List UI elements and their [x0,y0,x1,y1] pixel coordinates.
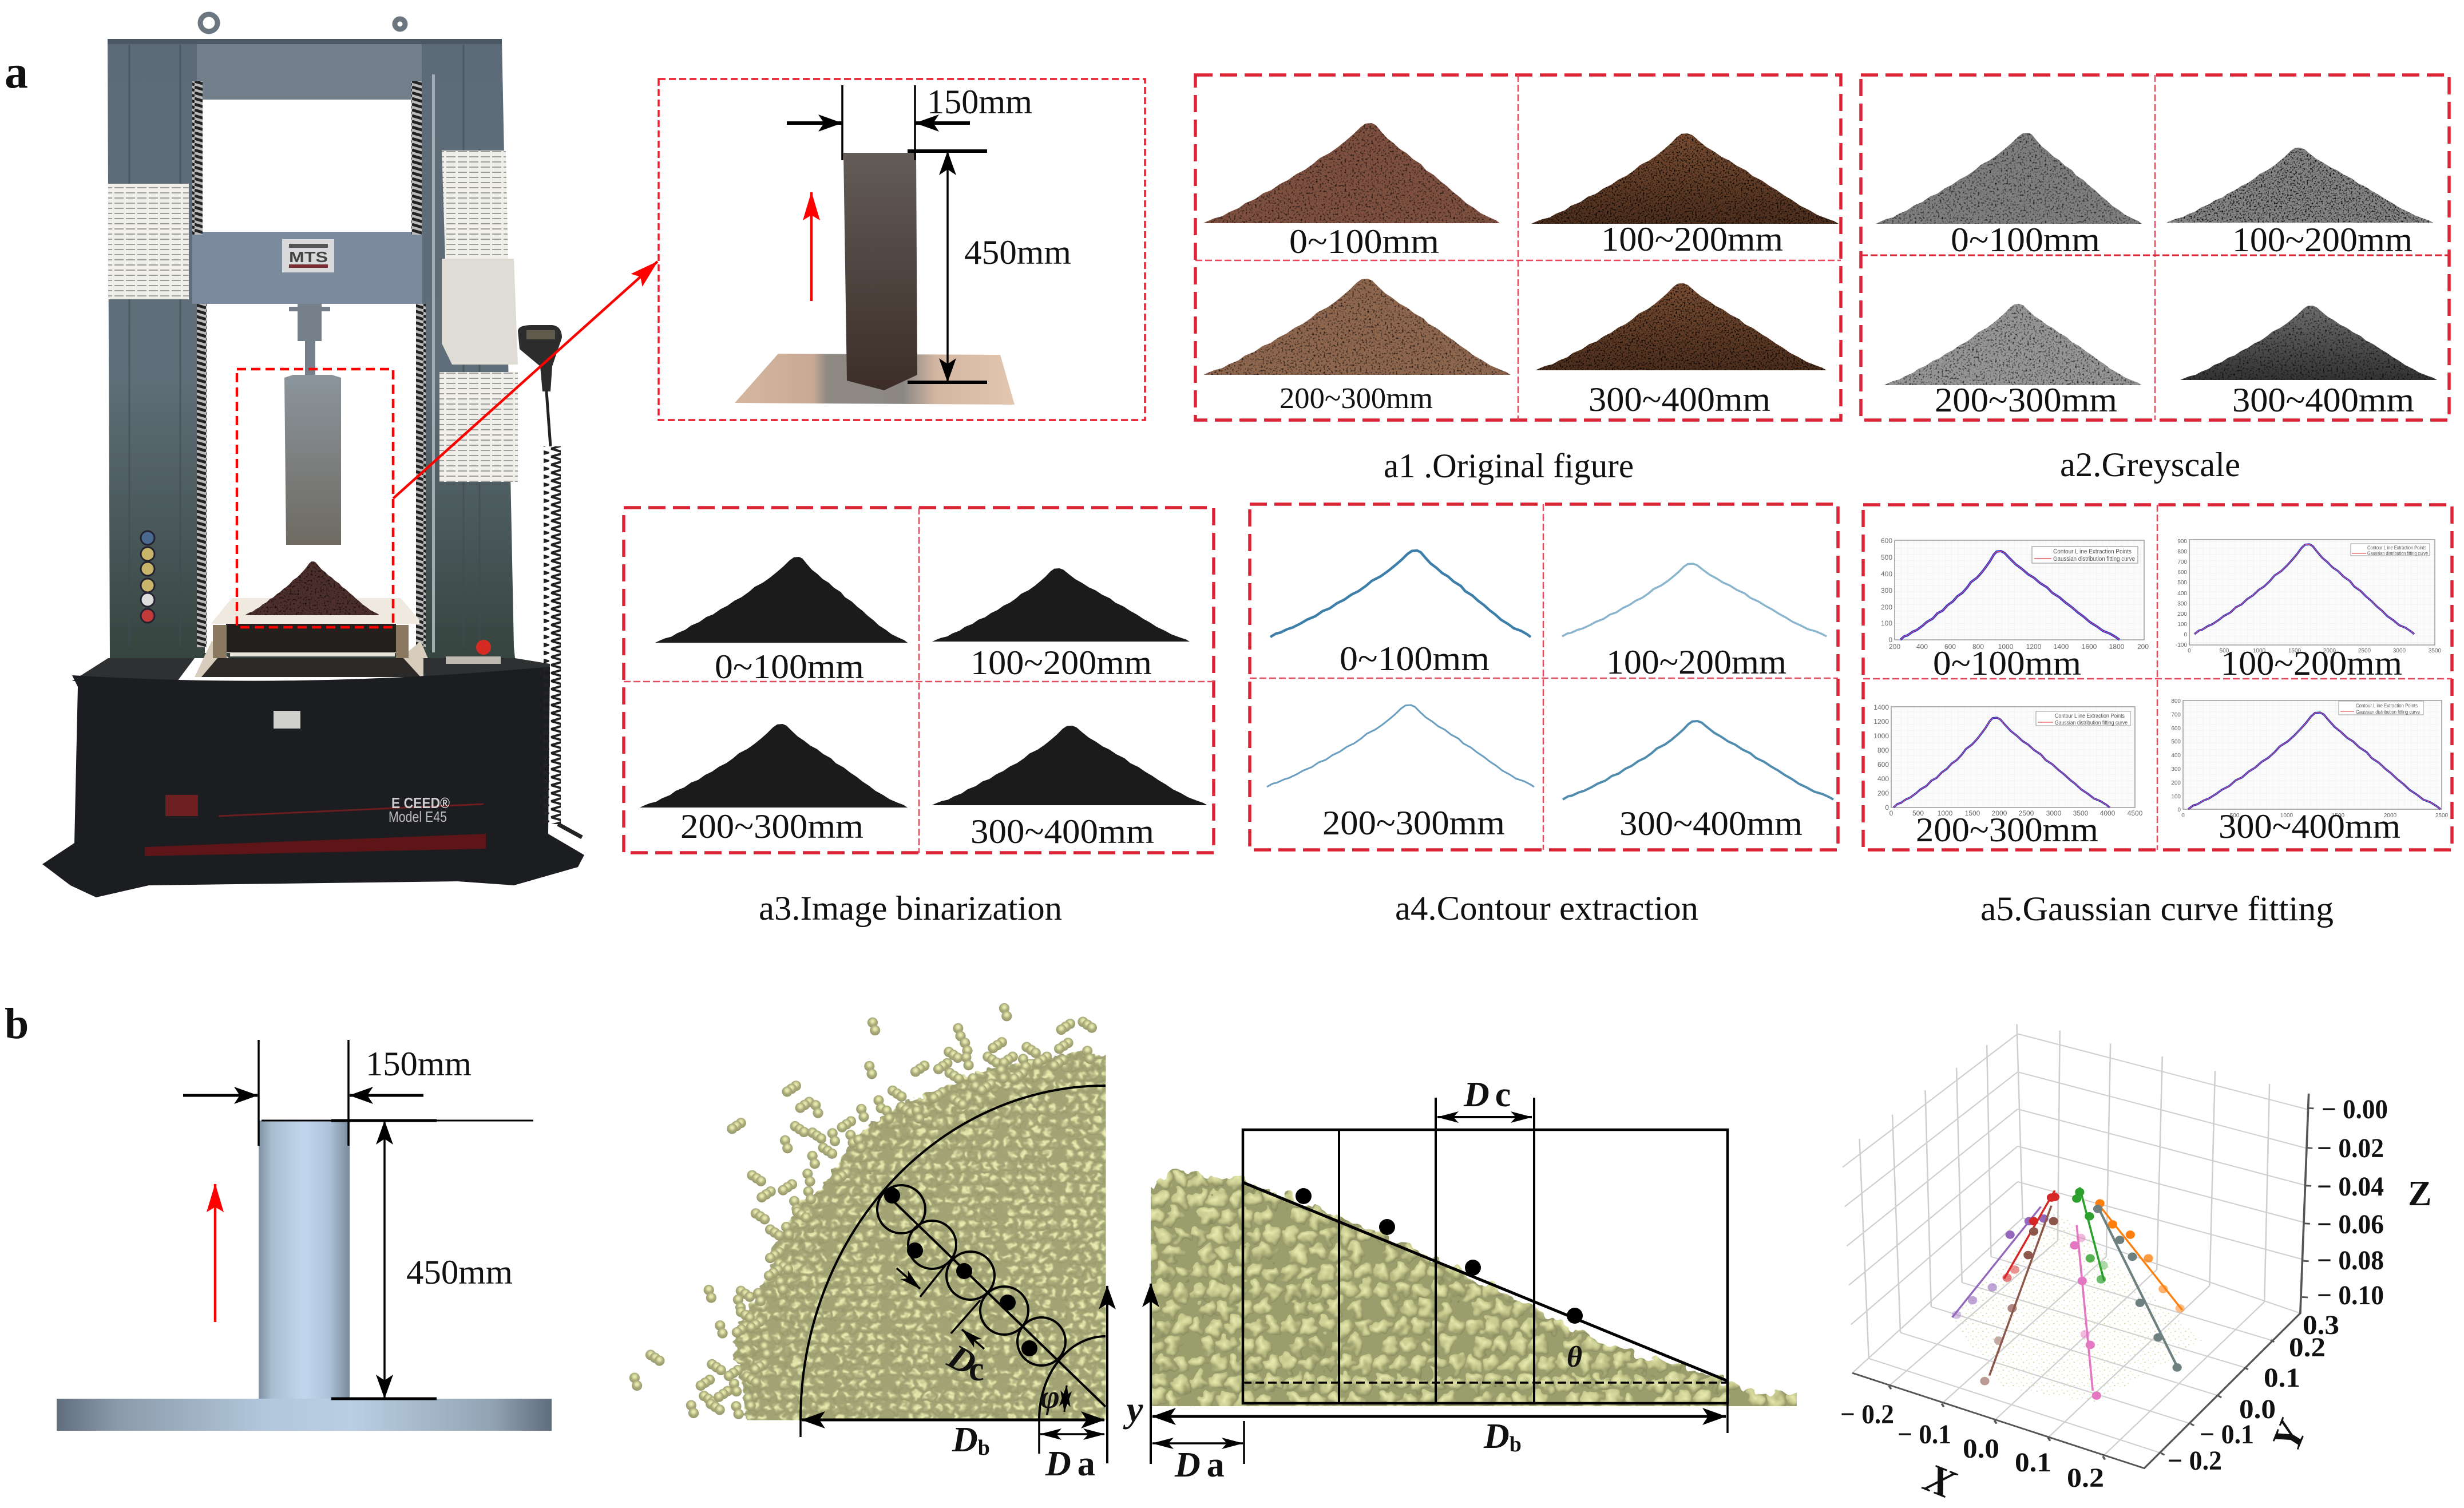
axes and dimensions [801,1286,1107,1463]
chart 100~200: 700 [2177,559,2187,565]
labels: D [952,1420,978,1459]
a1 labels [1279,220,1783,418]
dimension 450 mm: 450mm [964,233,1071,271]
chart 100~200: 3500 [2429,648,2442,654]
contour 100~200 [1558,564,1827,636]
a5 labels: 200~300mm [1916,811,2098,849]
y axis ticks: − 0.1 [2200,1419,2254,1450]
chart 100~200: 0 [2184,632,2187,638]
y axis ticks: 0.2 [2289,1332,2326,1363]
chart 0~100: 200 [1881,603,1892,611]
chart 100~200: 400 [2177,591,2187,597]
pile 300~400 [1535,283,1827,370]
chart 100~200: 500 [2220,648,2229,654]
chart 300~400: 200 [2171,780,2181,786]
pile 200~300 [1203,279,1519,375]
panel: a2 greyscale [1861,75,2449,420]
chart 0~100: Contour L ine Extraction Points [2053,548,2132,555]
panel: specimen closeup [659,79,1145,420]
chart 200~300: 2000 [1992,809,2007,817]
a4 labels [1322,640,1803,842]
grey pile 3 [1884,304,2146,385]
base plate [57,1399,552,1431]
soil pile [245,561,380,615]
chart 200~300: 1200 [1873,718,1889,726]
particle speckle floor [1950,1208,2203,1402]
caption a2: a2.Greyscale [2060,446,2240,484]
orange series [2095,1199,2185,1313]
chart 0~100: 1800 [2109,643,2125,651]
chart 200~300: 1400 [1873,703,1889,711]
pile 0~100 [1203,123,1517,223]
chart 0~100: 400 [1916,643,1928,651]
chart 200~300: 1000 [1938,809,1953,817]
a5 labels: 0~100mm [1933,644,2081,682]
plot drawing [1843,1024,2314,1469]
z axis ticks: − 0.02 [2317,1133,2384,1163]
slope line [1243,1182,1728,1381]
purple series [1952,1206,2049,1319]
base plate [735,354,1015,405]
red base band [145,834,486,856]
a2 labels [1935,221,2414,419]
black piles [640,557,1207,808]
labels: Da [1045,1444,1095,1483]
chart 300~400: 0 [2181,813,2185,819]
chart 200~300: 0 [1885,804,1889,812]
chart 100~200: 1500 [2288,648,2301,654]
a3 labels: 0~100mm [715,648,864,686]
grey pile 4 [2180,306,2439,380]
dimension 450 mm [262,1121,533,1399]
labels: c [969,1350,984,1388]
a2 labels: 100~200mm [2232,221,2412,259]
eye bolts [200,14,405,31]
labels [1123,1075,1582,1485]
contour 300~400 [1560,721,1833,799]
chart 0~100: 200 [2137,643,2149,651]
paper notices [108,151,518,482]
z axis ticks: − 0.00 [2322,1094,2388,1125]
labels: Dc [1463,1075,1511,1114]
base label plate [274,711,300,729]
sampling dots [1296,1188,1583,1324]
red series [2002,1190,2059,1282]
cylinder [259,1121,350,1399]
dimensions [1151,1117,1728,1464]
specimen column [284,375,341,545]
chart 300~400: 1000 [2280,813,2293,819]
chart 200~300: Gaussian distribution fitting curve [2055,720,2128,726]
z axis title: Z [2408,1174,2431,1213]
x axis ticks: 0.0 [1963,1434,1999,1464]
y axis ticks: 0.0 [2239,1394,2276,1424]
grey pile 2 [2164,148,2433,223]
chart 300~400: 0 [2177,807,2181,813]
panel: top view particle pile [629,1003,1123,1483]
labels: b [978,1436,990,1460]
Dc ticks [897,1265,984,1349]
panel: testing machine photo [42,14,657,897]
grid lines [1843,1024,2309,1456]
a1 labels: 300~400mm [1588,381,1770,418]
chart 100~200: 3000 [2393,648,2406,654]
labels: y [1123,1389,1143,1430]
angle arrow [1064,1386,1067,1412]
y axis ticks: − 0.2 [2168,1446,2222,1476]
brown series [1980,1206,2058,1386]
chart 0~100: 200 [1889,643,1900,651]
a4 labels: 100~200mm [1606,643,1786,681]
grey pile 1 [1876,133,2158,224]
chart 200~300 [1873,703,2143,817]
a5 labels: 100~200mm [2221,644,2402,682]
y axis ticks: 0.1 [2264,1363,2300,1393]
chart 100~200: -100 [2176,642,2187,648]
sampling dots [884,1188,1037,1356]
dimension 150 mm [787,83,1032,160]
y axis title: Y [2263,1413,2316,1456]
panel: 3D fitted lines plot [1840,1024,2431,1508]
a3 labels: 300~400mm [970,813,1154,850]
particles [629,1003,1123,1428]
grey series [2093,1205,2182,1372]
MTS red mark [165,795,198,816]
label: b: b [5,1000,29,1048]
dimension 150 mm: 150mm [366,1045,472,1083]
MTS badge: MTS [289,248,328,266]
label: a: a [5,46,28,98]
chart 100~200: 2000 [2323,648,2336,654]
outer and inner arcs [801,1086,1106,1420]
x axis title: X [1918,1454,1962,1508]
dimension 150 mm [183,1040,472,1146]
hanger clamp [289,304,330,375]
panel: a4 contour extraction [1250,504,1838,850]
chart 0~100: 400 [1881,570,1892,578]
a2 labels: 200~300mm [1935,381,2117,419]
chart 200~300: 1500 [1965,809,1980,817]
labels: θ [1567,1341,1582,1374]
a2 labels: 0~100mm [1951,221,2100,259]
base body [42,640,584,897]
chart 0~100 [1881,537,2149,651]
panel: side view particle pile [1123,1075,1808,1485]
chart 0~100: 100 [1881,619,1892,627]
coiled cable [544,391,582,837]
chart 200~300: 4000 [2100,809,2116,817]
x axis ticks: 0.2 [2067,1463,2104,1493]
a3 labels: 100~200mm [970,644,1152,682]
dimension 150 mm: 150mm [927,83,1032,121]
chart 0~100: 600 [1881,537,1892,545]
model text: Model E45 [389,808,447,825]
sampling circles [877,1185,1065,1365]
chart 100~200: 200 [2177,611,2187,618]
labels [941,1337,1095,1483]
chart 100~200: 300 [2177,601,2187,607]
chart 100~200: 2500 [2358,648,2371,654]
panel: a3 binarization [624,508,1214,853]
chart 300~400: 300 [2171,766,2181,773]
labels: φ [1040,1378,1060,1415]
y axis ticks: 0.3 [2303,1310,2339,1340]
chart 300~400: Contour L ine Extraction Points [2356,703,2418,709]
x axis ticks: − 0.2 [1840,1399,1894,1430]
chart 200~300: 0 [1889,809,1893,817]
chart 300~400: 500 [2171,739,2181,745]
z axis ticks: − 0.10 [2317,1280,2384,1311]
chart 200~300: 200 [1877,789,1889,797]
chart 200~300: 1000 [1873,732,1889,740]
chart 100~200: Gaussian distribution fitting curve [2367,551,2428,556]
MTS badge [282,239,334,272]
chart 100~200: 600 [2177,569,2187,576]
red selection box [237,369,393,627]
labels: D [941,1337,983,1383]
chart 100~200: 1000 [2253,648,2266,654]
chart 200~300: 2500 [2019,809,2034,817]
chart 200~300: 3000 [2046,809,2062,817]
a4 labels: 300~400mm [1619,805,1803,842]
green series [2072,1188,2108,1284]
a3 labels: 200~300mm [680,808,863,845]
contour 200~300 [1267,705,1542,787]
chart 200~300: 500 [1912,809,1924,817]
chart 300~400: Gaussian distribution fitting curve [2356,709,2420,715]
chart 300~400: 100 [2171,794,2181,800]
chart 200~300: 3500 [2073,809,2089,817]
model text [389,794,450,825]
chart 200~300: 800 [1877,746,1889,754]
caption a5: a5.Gaussian curve fitting [1980,890,2334,928]
caption a4: a4.Contour extraction [1395,889,1698,927]
column [843,153,917,390]
chart 200~300: 600 [1877,761,1889,769]
diagonal line [886,1194,1106,1407]
caption a3: a3.Image binarization [759,889,1062,927]
chart 300~400 [2171,698,2449,819]
machine frame [108,39,515,658]
chart 300~400: 600 [2171,726,2181,732]
chart 0~100: 800 [1972,643,1984,651]
chart 0~100: 500 [1881,553,1892,561]
z axis ticks: − 0.06 [2317,1209,2384,1240]
chart 100~200: Contour L ine Extraction Points [2367,545,2426,551]
a1 labels: 100~200mm [1601,220,1783,258]
x axis ticks: − 0.1 [1897,1419,1951,1450]
red lift arrow [214,1184,216,1322]
caption a1: a1 .Original figure [1384,447,1634,485]
warning icons [141,531,155,623]
chart 100~200: 100 [2177,622,2187,628]
pile 100~200 [1531,133,1839,224]
a2 labels: 300~400mm [2232,381,2414,419]
chart 0~100: 300 [1881,587,1892,595]
axes [1852,1094,2314,1469]
chart 300~400: 1500 [2332,813,2345,819]
chart 100~200: 0 [2188,648,2191,654]
red lift arrow [810,192,813,301]
z axis ticks: − 0.04 [2317,1171,2384,1202]
dimension 450 mm: 450mm [406,1253,513,1291]
a5 labels [1916,644,2402,849]
pink series [2070,1225,2101,1400]
red pointer arrow [393,262,657,498]
z axis ticks [2317,1094,2388,1311]
chart 0~100: 1600 [2082,643,2097,651]
chart 0~100: 1400 [2054,643,2069,651]
x axis ticks: 0.1 [2015,1447,2051,1478]
chart 100~200: 900 [2177,539,2187,545]
frame with strips [1243,1098,1728,1403]
chart 300~400: 800 [2171,698,2181,704]
a1 labels: 200~300mm [1279,382,1433,415]
a4 labels: 0~100mm [1340,640,1490,678]
chart 0~100: 600 [1944,643,1956,651]
chart 200~300: 4500 [2128,809,2143,817]
labels: b [1510,1432,1522,1456]
model text: E CEED® [391,794,450,812]
dashed base line [1243,1382,1728,1384]
chart 100~200: 500 [2177,580,2187,586]
y axis ticks [2168,1310,2339,1476]
model stripe [219,804,484,816]
contour 0~100 [1270,551,1545,637]
a5 labels: 300~400mm [2219,808,2400,845]
panel: a1 original figure [1195,75,1841,420]
a3 labels [680,644,1154,850]
labels: D [1483,1417,1510,1456]
labels: Da [1174,1446,1225,1485]
panel: a5 gaussian fitting [1863,505,2452,850]
chart 0~100: 1000 [1998,643,2014,651]
chart 300~400: 700 [2171,712,2181,718]
a4 labels: 200~300mm [1322,804,1505,842]
chart 200~300: 400 [1877,775,1889,783]
chart 200~300: Contour L ine Extraction Points [2055,713,2125,719]
chart 300~400: 2500 [2435,813,2449,819]
x axis ticks [1840,1399,2104,1493]
chart 0~100: 1200 [2026,643,2042,651]
z axis ticks: − 0.08 [2317,1245,2384,1276]
particles [1139,1170,1808,1419]
chart 300~400: 500 [2230,813,2240,819]
a1 labels: 0~100mm [1289,223,1439,260]
dimension 450 mm [908,151,1071,382]
chart 300~400: 400 [2171,753,2181,759]
chart 100~200: 800 [2177,549,2187,555]
chart 0~100: Gaussian distribution fitting curve [2053,556,2135,563]
panel: numerical model [57,1040,552,1431]
chart 100~200 [2176,539,2442,654]
chart 0~100: 0 [1888,636,1892,644]
platform [195,598,436,677]
chart 300~400: 2000 [2384,813,2397,819]
hand controller [518,325,562,391]
